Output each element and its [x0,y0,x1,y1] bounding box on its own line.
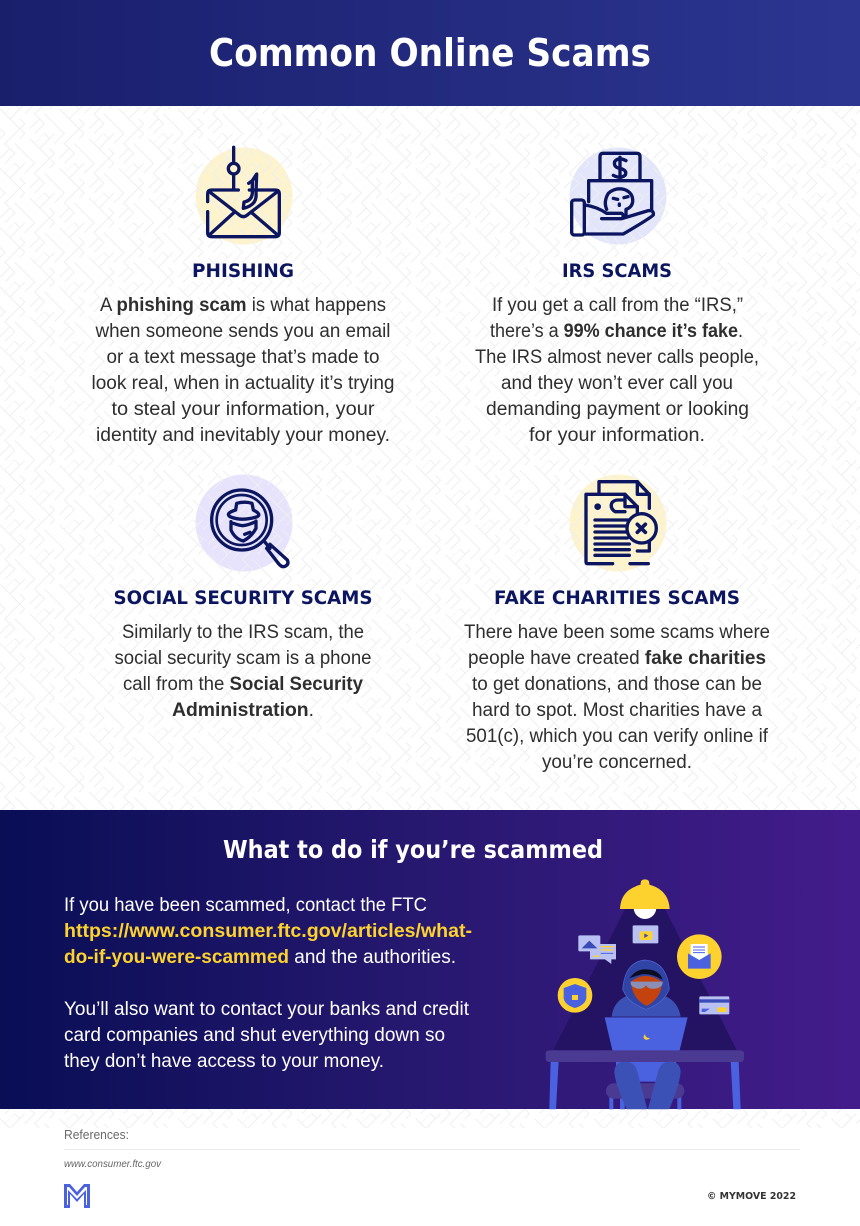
panel: what to do if scammed [0,810,860,1109]
text: phishing description: look real, when in actuality it’s trying [92,373,394,394]
text: contact the FTC: https://www.consumer.ftc.gov/articles/what- [64,921,472,942]
illustration: hooded hacker at laptop [546,879,744,1109]
text: social security description: social security scam is a phone [114,648,372,669]
text: IRS description: there’s a 99% chance it’s fake. [490,321,743,342]
text: IRS description: for your information. [529,425,705,446]
footer [0,1128,860,1226]
text: phishing description: A phishing scam is what happens [100,295,386,316]
text: social security description: Similarly to the IRS scam, the [122,622,364,643]
desk and chair [546,1050,744,1109]
text: IRS description: and they won’t ever call you [501,373,733,394]
text: contact banks: they don’t have access to your money. [64,1051,384,1072]
heading: IRS scams: IRS SCAMS [562,260,672,282]
text: social security description: Administration. [172,700,314,721]
lamp light cone [553,909,737,1050]
icon: magnifier with spy [212,490,288,567]
text: IRS description [475,295,759,446]
title: Common Online Scams [209,31,651,75]
heading: social security scams: SOCIAL SECURITY SCAMS [114,587,372,609]
icon: credit card [699,996,729,1014]
icon: lamp [620,879,670,909]
text: contact the FTC: If you have been scammed, contact the FTC [64,895,427,916]
text: fake charities description: 501(c), which you can verify online if [466,726,769,747]
text: IRS description: If you get a call from the “IRS,” [492,295,743,316]
icon backdrop: circles [196,148,666,572]
text: contact banks [64,999,470,1072]
text: contact banks: You’ll also want to contact your banks and credit [64,999,470,1020]
heading: what to do: What to do if you’re scammed [223,835,603,864]
text: phishing description: identity and inevitably your money. [96,425,390,446]
icon: video window [633,925,658,943]
icon: hand with money and skull [572,153,653,235]
text: contact the FTC: do-if-you-were-scammed and the authorities. [64,947,456,968]
text: fake charities description: people have created fake charities [468,648,766,669]
icon: shield badge [558,978,592,1013]
text: fake charities description [464,622,770,773]
icon: envelope badge [677,934,722,979]
header banner [0,0,860,106]
laptop [605,1017,688,1052]
text: IRS description: The IRS almost never calls people, [475,347,759,368]
text: phishing description: to steal your information, your [112,399,375,420]
text: phishing description: when someone sends you an email [95,321,391,342]
text: contact banks: card companies and shut everything down so [64,1025,445,1046]
heading: fake charities scams: FAKE CHARITIES SCAMS [494,587,740,609]
reference url: www.consumer.ftc.gov [64,1158,162,1170]
references label: References: [64,1128,129,1142]
panel: IRS scams [475,153,759,446]
icon: envelope on hook [208,147,279,237]
logo: M [64,1184,90,1208]
text: fake charities description: hard to spot. Most charities have a [472,700,762,721]
text: social security description [114,622,372,721]
icon: documents with x [586,482,656,564]
copyright: © MYMOVE 2022 [707,1191,796,1202]
text: contact the FTC [64,895,472,968]
panel: phishing [92,147,394,446]
panel: fake charities scams [464,482,770,773]
text: fake charities description: to get donations, and those can be [472,674,762,695]
panel: social security scams [114,490,372,721]
text: IRS description: demanding payment or looking [486,399,749,420]
text: phishing description: or a text message that’s made to [106,347,380,368]
hacker [612,960,681,1017]
heading: phishing: PHISHING [192,260,294,282]
text: fake charities description: you’re concerned. [542,752,692,773]
text: fake charities description: There have been some scams where [464,622,770,643]
text: social security description: call from the Social Security [123,674,363,695]
text: phishing description [92,295,394,446]
icon: picture and chat bubbles [578,935,616,964]
